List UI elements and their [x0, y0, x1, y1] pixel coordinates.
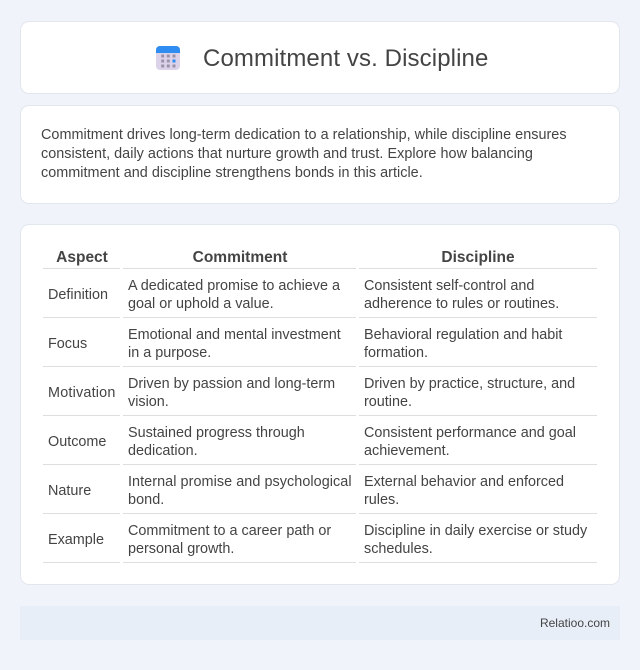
table row: Example: Example [48, 532, 104, 548]
table row: Motivation [48, 376, 575, 410]
table row: Definition: A dedicated promise to achieve a [128, 278, 340, 294]
table row: Motivation: Motivation [48, 385, 116, 401]
table row: Focus: Behavioral regulation and habit [364, 327, 562, 343]
table row: Focus: Emotional and mental investment [128, 327, 341, 343]
table row: Outcome [48, 425, 576, 459]
table row: Focus: Focus [48, 336, 87, 352]
table row: Outcome: Sustained progress through [128, 425, 305, 441]
text block: introduction [41, 127, 567, 181]
panel: title card [20, 21, 620, 94]
table row: Focus: in a purpose. [128, 345, 211, 361]
title: Commitment vs. Discipline [203, 45, 488, 72]
icon: calendar [156, 46, 180, 70]
table row: Nature: External behavior and enforced [364, 474, 564, 490]
table row: Outcome: Outcome [48, 434, 106, 450]
table row: Nature: bond. [128, 492, 164, 508]
table row: Outcome: Consistent performance and goal [364, 425, 576, 441]
table row: Example: Commitment to a career path or [128, 523, 331, 539]
table row: Definition: goal or uphold a value. [128, 296, 274, 312]
table header: Aspect: Aspect [56, 249, 108, 266]
table row: Example [48, 523, 588, 557]
text block: introduction: commitment and discipline strengthens bonds in this article. [41, 165, 423, 181]
table row: Nature: Internal promise and psychological [128, 474, 352, 490]
text block: introduction: Commitment drives long-term dedication to a relationship, while discipline ensures [41, 127, 567, 143]
table row: Example: personal growth. [128, 541, 234, 557]
table row: Example: schedules. [364, 541, 433, 557]
table row: Motivation: Driven by practice, structure, and [364, 376, 575, 392]
table row: Outcome: dedication. [128, 443, 198, 459]
table row: Definition: Consistent self-control and [364, 278, 534, 294]
table header: Discipline: Discipline [441, 249, 515, 266]
table row: Motivation: Driven by passion and long-term [128, 376, 335, 392]
table row: Focus: formation. [364, 345, 428, 361]
table row: Outcome: achievement. [364, 443, 450, 459]
table header: Commitment: Commitment [193, 249, 287, 266]
panel: introduction card [20, 105, 620, 204]
table row: Focus [48, 327, 562, 361]
footer bar [20, 606, 620, 640]
table row: Nature [48, 474, 564, 508]
text block: introduction: consistent, daily actions that nurture growth and trust. Explore how balancing [41, 146, 533, 162]
table row: Nature: Nature [48, 483, 91, 499]
footer text: Relatioo.com: Relatioo.com [540, 616, 610, 630]
table row: Definition: Definition [48, 287, 108, 303]
table row: Example: Discipline in daily exercise or study [364, 523, 587, 539]
table row: Definition: adherence to rules or routines. [364, 296, 559, 312]
table row: Nature: rules. [364, 492, 399, 508]
panel: comparison table card [20, 224, 620, 585]
table row: Definition [48, 278, 559, 312]
table row: Motivation: vision. [128, 394, 169, 410]
table row: Motivation: routine. [364, 394, 412, 410]
